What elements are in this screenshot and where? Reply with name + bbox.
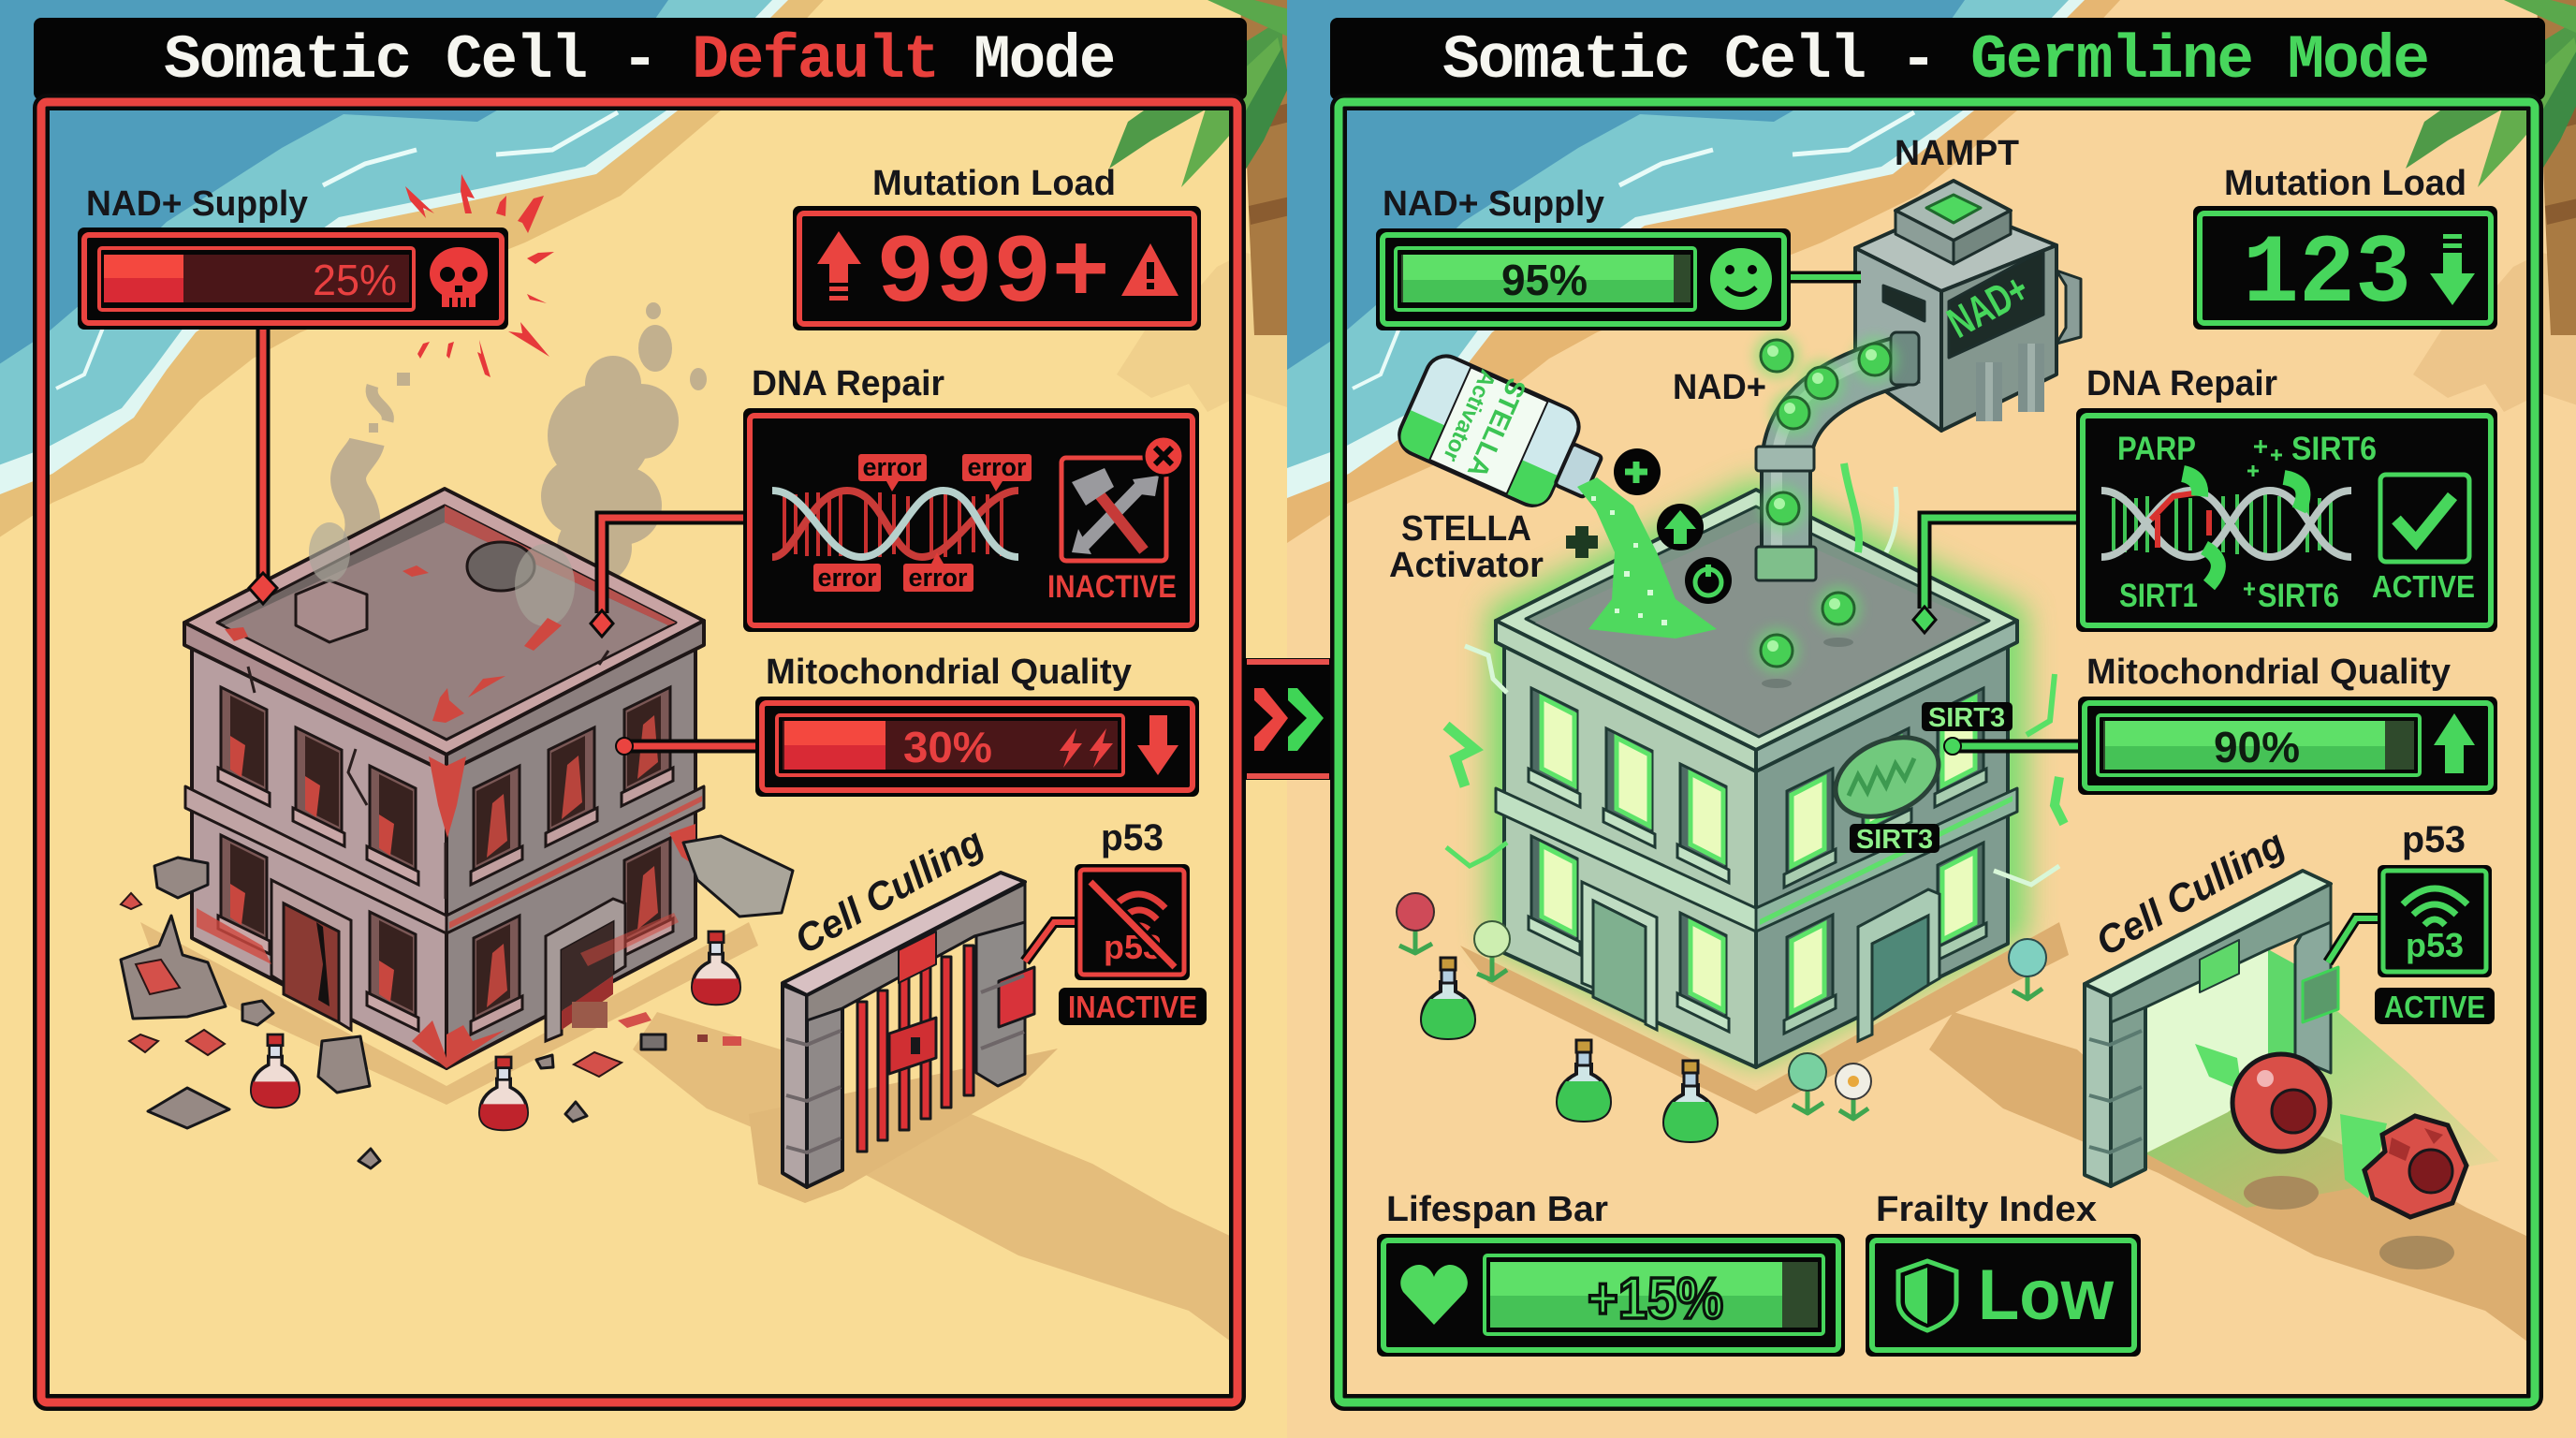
widget: mitochondrial quality gauge	[755, 697, 1199, 797]
culled cells	[2195, 1044, 2466, 1269]
icon: up arrow badge	[1657, 504, 1704, 550]
background: beach scene, default side	[0, 0, 1301, 1438]
title bar: germline mode: Somatic Cell - Germline Mode	[1442, 25, 2428, 95]
widget: frailty index: Low	[1978, 1255, 2115, 1335]
title bar: default mode: Somatic Cell - Default Mode	[164, 25, 1114, 95]
label: DNA Repair: DNA Repair	[2086, 364, 2277, 404]
label: Lifespan Bar: Lifespan Bar	[1386, 1190, 1608, 1229]
widget: NAD+ supply gauge	[1376, 228, 1791, 330]
widget: mitochondrial quality gauge: 30%	[903, 723, 992, 771]
label: STELLA Activator: STELLA	[1401, 509, 1531, 549]
icon: down arrow	[2430, 234, 2475, 305]
icon: warning triangle	[1121, 243, 1178, 296]
icon: broken tools	[1061, 458, 1166, 561]
label: Frailty Index: Frailty Index	[1876, 1190, 2097, 1229]
building: ruined cell	[140, 489, 758, 1105]
widget: DNA repair active: SIRT1	[2119, 578, 2198, 614]
connector: NAD+ to roof	[249, 328, 277, 604]
tag: SIRT3 upper: SIRT3	[1928, 703, 2005, 733]
panel: somatic cell default mode	[34, 18, 1247, 1402]
widget: lifespan bar: +15%	[1588, 1267, 1723, 1331]
widget: DNA repair active: SIRT6	[2291, 431, 2377, 467]
rubble pile	[121, 836, 793, 1168]
connector: DNA repair to roof	[591, 518, 745, 637]
widget: NAD+ supply gauge: 95%	[1501, 256, 1588, 304]
label: STELLA Activator: Activator	[1389, 546, 1544, 585]
widget: DNA repair active	[2076, 408, 2497, 632]
icon: heart	[1400, 1265, 1468, 1325]
widget: mitochondrial quality gauge: 90%	[2214, 723, 2300, 771]
label: Mutation Load: Mutation Load	[2224, 164, 2466, 203]
red gate bars	[857, 946, 973, 1152]
icon: skull	[430, 247, 488, 307]
error tags: error	[817, 564, 877, 592]
label: p53: p53	[2402, 819, 2466, 860]
icon: red chevron	[1254, 688, 1288, 751]
widget: mitochondrial quality gauge	[2078, 697, 2497, 795]
error tags	[813, 453, 1032, 592]
cell: senescent damaged	[2364, 1116, 2466, 1217]
dna helix being repaired	[2101, 474, 2351, 585]
icon: plus sign	[1566, 526, 1598, 558]
bottle: STELLA Activator: STELLA	[1461, 374, 1531, 482]
widget: DNA repair active: SIRT6	[2258, 578, 2339, 614]
widget: p53 signal disabled	[1075, 864, 1190, 980]
icon: lightning bolts	[1060, 728, 1113, 768]
bottle: STELLA Activator: Activator	[1438, 366, 1500, 465]
widget: frailty index	[1866, 1234, 2141, 1357]
icon: down arrow	[1137, 715, 1178, 775]
icon: smile badge	[1685, 557, 1732, 604]
title bar: germline mode	[1330, 18, 2545, 100]
widget: mutation load 123	[2193, 206, 2497, 330]
panel frame: red	[41, 102, 1237, 1402]
icon: up arrow	[817, 231, 861, 283]
icon: shield	[1898, 1261, 1956, 1330]
flowers	[1397, 893, 2046, 1119]
icon: smiley	[1710, 248, 1772, 310]
label: NAD+ Supply: NAD+ Supply	[86, 184, 308, 224]
icon: up arrow	[2434, 713, 2475, 773]
dna helix with errors	[772, 491, 1018, 557]
label: Cell Culling: Cell Culling	[2088, 821, 2291, 964]
gate: cell culling open	[2085, 871, 2499, 1208]
building cracks	[248, 651, 608, 899]
label: DNA Repair: DNA Repair	[752, 364, 944, 404]
connector: mitochondria to organelle	[1944, 738, 2080, 755]
label: p53: p53	[1101, 817, 1164, 858]
icon: x badge	[1144, 436, 1183, 476]
widget: DNA repair inactive	[743, 408, 1199, 632]
connector: NAD+ supply to NAMPT	[1788, 271, 1861, 283]
poured liquid	[1577, 477, 1717, 638]
cell: senescent round	[2232, 1054, 2330, 1152]
panel frame: green	[1339, 102, 2535, 1402]
red alarm sparks	[405, 174, 554, 377]
transition connector with chevrons	[1242, 658, 1332, 780]
label: NAD+: NAD+	[1673, 368, 1766, 407]
repair enzymes	[2183, 474, 2200, 496]
label: NAD+ Supply: NAD+ Supply	[1383, 184, 1604, 224]
widget: mutation load 999+	[793, 206, 1201, 330]
widget: NAD+ supply gauge	[78, 227, 508, 330]
error tags: error	[967, 453, 1027, 481]
machine: NAMPT	[1855, 181, 2081, 431]
label: Mitochondrial Quality: Mitochondrial Quality	[766, 653, 1132, 692]
title bar: default mode	[34, 18, 1247, 100]
icon: check box	[2380, 475, 2469, 562]
potion bottles: green	[1422, 958, 1717, 1141]
background: beach scene, germline side	[1287, 0, 2576, 1438]
status chip: active: ACTIVE	[2384, 990, 2485, 1024]
connector: p53 to gate	[1025, 922, 1076, 961]
energy sparks around building	[1446, 463, 2064, 885]
smoke plumes	[348, 302, 707, 609]
tag: SIRT3 lower: SIRT3	[1856, 825, 1933, 855]
widget: p53 signal active: p53	[2406, 926, 2464, 964]
building damage: blood and rust stains	[197, 565, 702, 1068]
connector: mitochondria to wall	[616, 738, 758, 755]
label: Mutation Load: Mutation Load	[872, 164, 1116, 203]
connector: DNA repair to roof	[1913, 518, 2080, 633]
building: healthy cell	[1460, 490, 2069, 1114]
widget: lifespan bar	[1377, 1234, 1845, 1357]
widget: mutation load 123: 123	[2243, 220, 2411, 330]
pipe: NAD+ delivery	[1756, 332, 1919, 580]
bottle: STELLA Activator	[1393, 345, 1717, 638]
connector: p53 to gate	[2328, 918, 2379, 962]
building windows and doors: lit	[1529, 688, 1986, 1041]
widget: DNA repair inactive: INACTIVE	[1047, 569, 1177, 605]
widget: DNA repair active: ACTIVE	[2372, 569, 2475, 604]
widget: DNA repair active: PARP	[2117, 431, 2196, 467]
widget: NAD+ supply gauge: 25%	[313, 256, 397, 304]
widget: mutation load 999+: 999+	[876, 220, 1110, 330]
potion bottles: red	[252, 932, 739, 1129]
icon: plus badge	[1614, 448, 1661, 495]
widget: p53 signal active	[2378, 865, 2492, 977]
icon: green chevron	[1288, 688, 1324, 751]
roof smoke overlay	[309, 522, 575, 626]
label: NAMPT: NAMPT	[1895, 134, 2019, 173]
widget: p53 signal disabled: p53	[1104, 928, 1162, 966]
error tags: error	[908, 564, 968, 592]
error tags: error	[862, 453, 922, 481]
label: Cell Culling: Cell Culling	[787, 819, 990, 962]
gate: cell culling locked	[749, 873, 1058, 1203]
organelle: mitochondrion	[1822, 722, 1952, 832]
NAD+ molecules	[1753, 332, 1898, 688]
building glow	[1488, 477, 2027, 1067]
label: NAD+ on machine screen: NAD+	[1939, 264, 2037, 347]
status chip: inactive: INACTIVE	[1068, 990, 1197, 1024]
label: Mitochondrial Quality: Mitochondrial Quality	[2086, 653, 2451, 692]
label: STELLA Activator	[1389, 509, 1544, 585]
building windows and doors	[218, 687, 673, 1041]
rubble: red fragments	[121, 893, 741, 1077]
panel: somatic cell germline mode	[1330, 18, 2545, 1402]
